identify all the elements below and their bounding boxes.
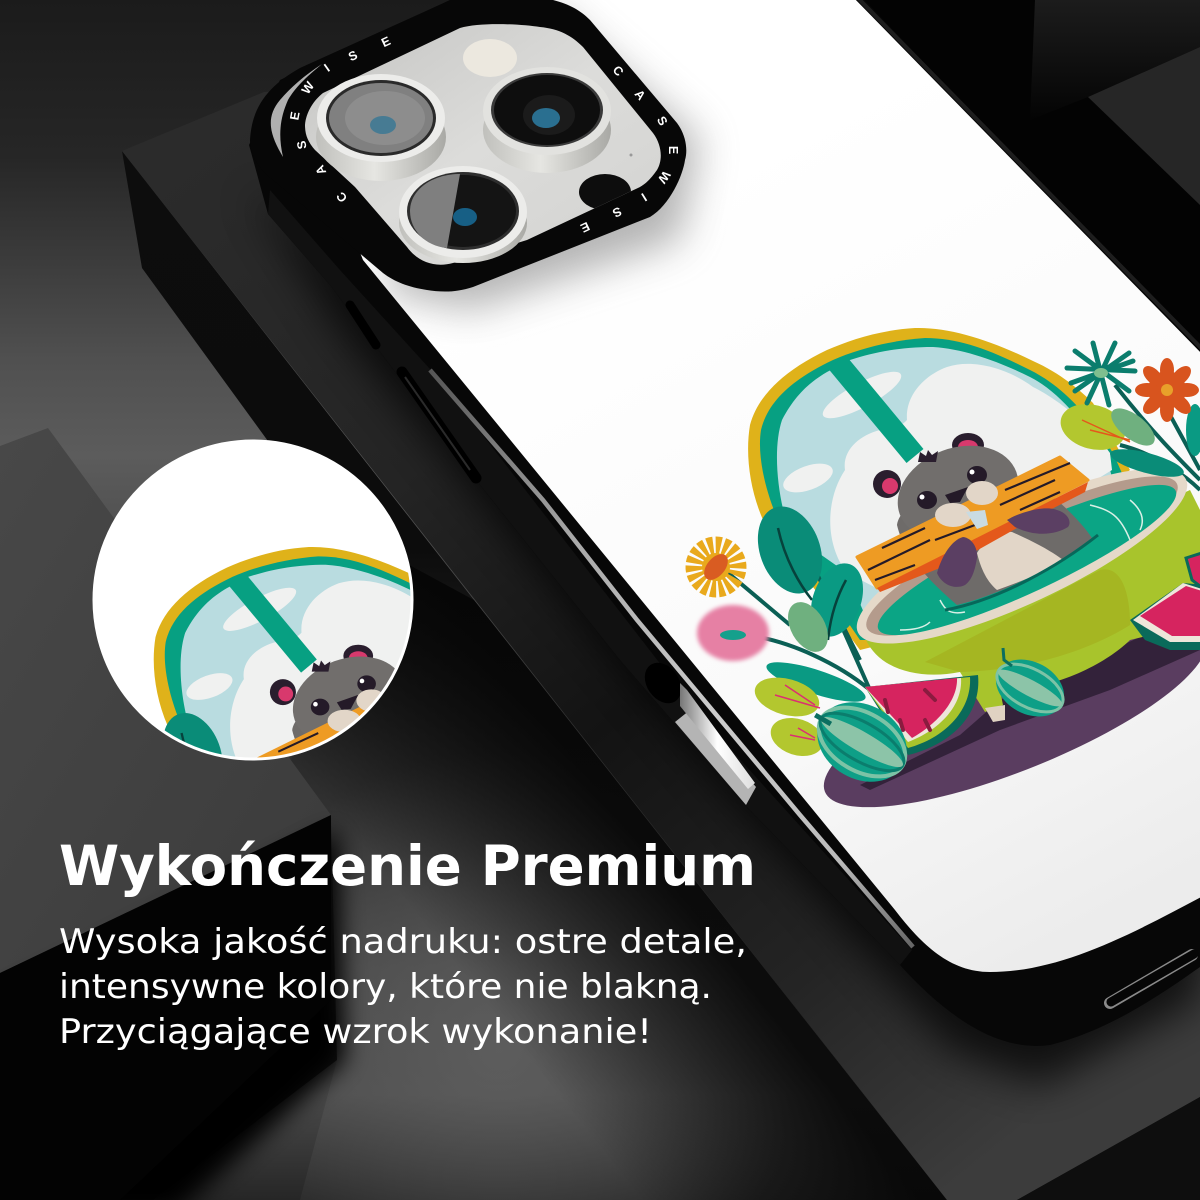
brand ring text CASEWISE: S	[294, 140, 310, 150]
brand ring text CASEWISE: I	[322, 61, 332, 75]
camera hole	[579, 174, 631, 210]
tub rim and water	[856, 470, 1188, 644]
small melon	[995, 660, 1065, 716]
watermelon right	[1130, 552, 1200, 650]
orange flower	[1135, 358, 1199, 422]
phone silver side button	[675, 683, 756, 805]
brand ring text CASEWISE: C	[610, 63, 626, 79]
beaver eyes	[917, 466, 987, 509]
camera bump	[250, 0, 686, 292]
phone speaker slot	[1110, 955, 1192, 1003]
phone volume button	[350, 305, 376, 345]
brand ring text CASEWISE: I	[639, 190, 649, 204]
camera glass	[305, 24, 661, 265]
camera bump outer ring	[250, 0, 686, 292]
teal spiky flower	[1067, 343, 1135, 405]
phone speaker inner	[1111, 954, 1194, 1002]
right leaves	[1060, 404, 1200, 477]
brand ring text CASEWISE: W	[655, 168, 673, 186]
brand ring text CASEWISE: A	[632, 87, 648, 103]
illustration: beaver in tub	[687, 328, 1200, 843]
block: central side face darkening towards edge	[285, 560, 947, 1200]
brand ring text CASEWISE: W	[299, 79, 317, 97]
block: central side face	[122, 151, 947, 1200]
pink puff flower	[697, 605, 769, 661]
shadow: soft edge of foreground block	[0, 830, 345, 1200]
phone body outer	[249, 0, 1200, 1046]
block: rear right black wall	[850, 0, 1200, 420]
phone case	[249, 0, 1200, 1046]
lens upper right	[483, 67, 611, 173]
beaver muzzle	[935, 481, 998, 529]
brand ring text CASEWISE: E	[287, 111, 303, 121]
flash	[463, 39, 517, 77]
block: central side face highlight	[291, 600, 947, 1200]
phone long side button highlight	[405, 377, 470, 470]
brand ring text CASEWISE: S	[610, 204, 624, 220]
phone port	[637, 656, 689, 710]
beaver hair tuft	[918, 450, 938, 462]
stems and leaves left	[727, 385, 1200, 762]
phone right edge line	[855, 0, 1200, 352]
lens upper left	[316, 74, 446, 181]
phone side band	[268, 190, 912, 965]
block: bottom right front face	[1017, 1097, 1200, 1200]
small melon stem	[1003, 648, 1012, 666]
zoom circle inset	[92, 440, 414, 760]
brand ring text CASEWISE	[287, 34, 680, 235]
brand ring text CASEWISE: E	[578, 219, 592, 235]
description text	[59, 922, 747, 1052]
brand ring text CASEWISE: C	[334, 189, 350, 205]
brand ring text CASEWISE: S	[654, 114, 670, 128]
brand ring text CASEWISE: E	[666, 146, 680, 154]
title: Wykończenie Premium	[59, 834, 756, 898]
block: top right face	[1088, 47, 1200, 205]
description text: Wysoka jakość nadruku: ostre detale,	[59, 922, 747, 962]
beaver arms	[937, 508, 1070, 587]
phone white back	[300, 0, 1200, 972]
soft shadow around camera bump	[380, 0, 700, 310]
lens bottom	[399, 166, 527, 263]
description text: Przyciągające wzrok wykonanie!	[59, 1012, 652, 1052]
big melon	[814, 702, 908, 782]
block: left foreground top face	[0, 428, 331, 973]
camera bump silver crescent	[271, 64, 322, 157]
brand ring text CASEWISE: S	[346, 48, 360, 64]
shadow: phone cast shadow on block	[250, 190, 1200, 1085]
yellow daisy	[687, 538, 745, 596]
block: left foreground black face	[0, 815, 331, 1200]
phone rim highlight	[430, 370, 913, 947]
brand ring text CASEWISE: E	[379, 34, 393, 50]
ground shadow	[824, 637, 1200, 808]
brand ring text CASEWISE: A	[313, 163, 329, 177]
block: top right reflection	[1030, 0, 1200, 120]
beaver	[857, 430, 1098, 610]
beaver log	[857, 457, 1088, 592]
beaver ears	[873, 433, 984, 498]
arch window	[748, 328, 1130, 650]
description text: intensywne kolory, które nie blakną.	[59, 967, 712, 1007]
watermelon left	[865, 675, 978, 755]
inset enlarged illustration	[154, 547, 410, 758]
phone long side button	[402, 372, 476, 478]
tub body	[866, 490, 1200, 722]
mic dot	[630, 154, 632, 156]
